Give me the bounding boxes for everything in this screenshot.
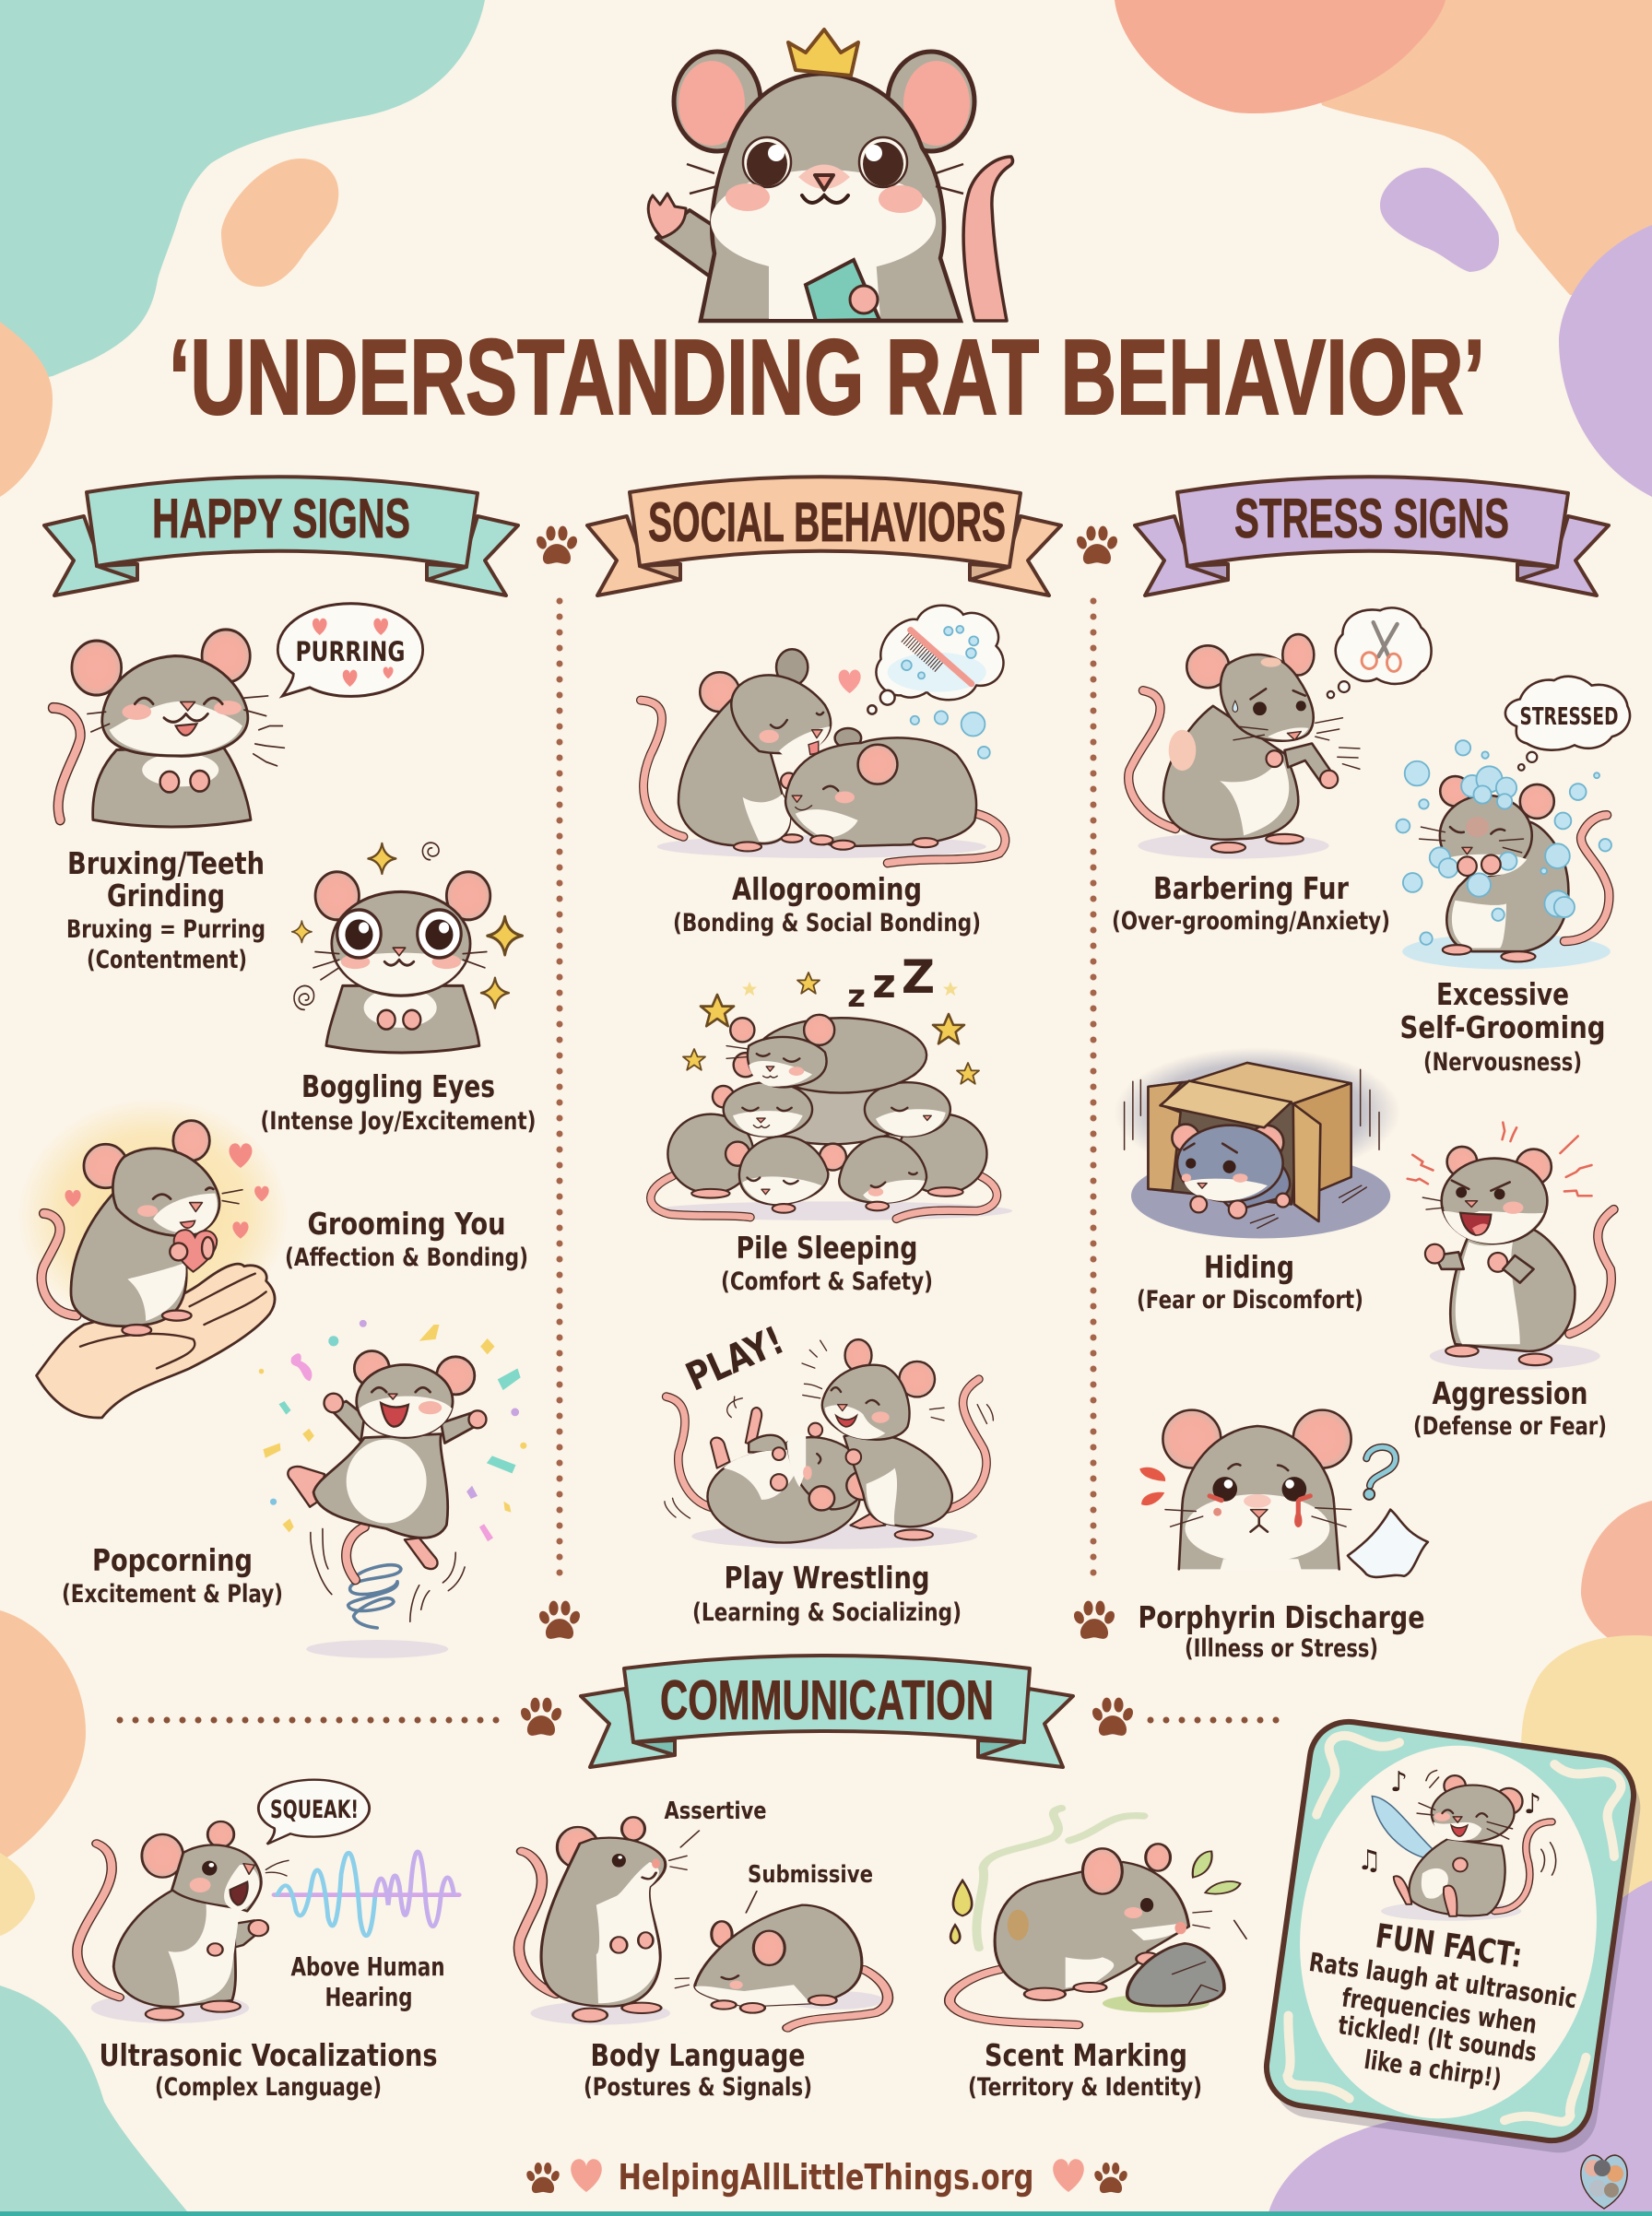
banner: stress signs: STRESS SIGNS: [1234, 488, 1509, 549]
fun fact text: Rats laugh at ultrasonic: [1307, 1947, 1579, 2014]
label: excessive self-grooming: Excessive: [1436, 976, 1569, 1012]
fun fact text: frequencies when: [1340, 1982, 1539, 2040]
dotted dividers: [120, 601, 1286, 1720]
illustration: grooming you: [18, 1099, 288, 1418]
label: bruxing: (Contentment): [87, 946, 247, 974]
fun fact text: [1307, 1917, 1579, 2093]
fun fact text: FUN FACT:: [1374, 1917, 1525, 1975]
pile sleeping stars and zzz: z: [872, 961, 896, 1008]
illustration: scent marking: [950, 1809, 1246, 2025]
label: excessive self-grooming: (Nervousness): [1423, 1048, 1582, 1077]
banner: social behaviors: [587, 477, 1061, 595]
label: barbering fur: (Over-grooming/Anxiety): [1112, 907, 1390, 936]
banner: happy signs: [44, 477, 518, 595]
blob: peach bottom left: [0, 1610, 86, 1862]
illustration: porphyrin discharge: [1139, 1410, 1428, 1577]
label: bruxing: Grinding: [107, 878, 225, 914]
fun fact text: tickled! (It sounds: [1337, 2010, 1539, 2068]
music notes: [1357, 1766, 1541, 1877]
music notes: ♪: [1524, 1788, 1541, 1821]
label: popcorning: [62, 1542, 283, 1609]
label: body language: Body Language: [590, 2037, 806, 2073]
label: porphyrin discharge: [1138, 1599, 1425, 1663]
label: popcorning: (Excitement & Play): [62, 1580, 283, 1609]
label: allogrooming: Allogrooming: [732, 871, 922, 907]
banner: social behaviors: SOCIAL BEHAVIORS: [648, 491, 1006, 553]
card rat with feather: [1372, 1771, 1556, 1921]
blob: small purple: [1380, 168, 1499, 272]
label: excessive self-grooming: Self-Grooming: [1399, 1009, 1606, 1045]
banner: communication: COMMUNICATION: [660, 1669, 994, 1731]
label: pile sleeping: [721, 1230, 933, 1296]
blob: teal top left: [0, 0, 485, 387]
blob: peach left: [0, 322, 53, 497]
logo badge: [1581, 2155, 1627, 2209]
label: barbering fur: [1112, 870, 1390, 936]
illustration: boggling eyes rat: [292, 843, 523, 1053]
footer website: HelpingAllLittleThings.org: [618, 2157, 1034, 2198]
label: hiding: Hiding: [1204, 1249, 1294, 1285]
panel: fun fact card: [1261, 1716, 1646, 2158]
label: above human hearing: Hearing: [324, 1982, 413, 2012]
label: ultrasonic vocalizations: (Complex Language): [155, 2073, 382, 2102]
label: grooming you: Grooming You: [308, 1206, 505, 1242]
music notes: ♫: [1357, 1845, 1382, 1877]
pile sleeping stars and zzz: z: [847, 978, 866, 1015]
illustration: hiding in box: [1114, 1047, 1400, 1239]
label: boggling eyes: Boggling Eyes: [301, 1068, 495, 1104]
label: popcorning: Popcorning: [92, 1542, 253, 1578]
label: above human hearing: [291, 1951, 444, 2012]
blob: purple right: [1559, 225, 1652, 497]
card corner flourishes: [1278, 1732, 1626, 2130]
label: play wrestling: [692, 1560, 962, 1627]
blob: small peach: [221, 159, 338, 287]
label: play wrestling: Play Wrestling: [725, 1560, 929, 1596]
banner: happy signs: HAPPY SIGNS: [152, 488, 410, 549]
label: scent marking: [968, 2037, 1202, 2102]
illustration: allogrooming: [641, 606, 1005, 863]
illustration: purring rat: [53, 604, 423, 827]
blob: purple bottom right: [1268, 1880, 1652, 2216]
label: submissive: Submissive: [748, 1861, 873, 1889]
label: excessive self-grooming: [1399, 976, 1606, 1077]
label: pile sleeping: Pile Sleeping: [736, 1230, 918, 1266]
label: bruxing: [66, 845, 266, 974]
label: squeak: SQUEAK!: [270, 1796, 359, 1824]
bottom teal bar: [0, 2211, 1652, 2216]
label: scent marking: Scent Marking: [985, 2037, 1187, 2073]
illustration: pile sleeping: [650, 1015, 1012, 1220]
mascot rat with crown and book: [648, 29, 1012, 321]
label: porphyrin discharge: Porphyrin Discharge: [1138, 1599, 1425, 1635]
label: ultrasonic vocalizations: [100, 2037, 437, 2102]
label: body language: (Postures & Signals): [584, 2073, 812, 2102]
banner: communication: [581, 1656, 1073, 1767]
label: barbering fur: Barbering Fur: [1153, 870, 1350, 906]
blob: yellow bottom left: [0, 1853, 35, 1936]
label: bruxing: Bruxing = Purring: [66, 915, 266, 944]
label: aggression: Aggression: [1433, 1375, 1587, 1411]
label: allogrooming: (Bonding & Social Bonding): [673, 909, 981, 937]
paw icons: [519, 526, 1135, 2193]
illustration: excessive self-grooming: [1396, 677, 1630, 969]
label: bruxing: Bruxing/Teeth: [67, 845, 265, 881]
label: porphyrin discharge: (Illness or Stress): [1185, 1634, 1378, 1663]
label: hiding: [1137, 1249, 1363, 1314]
label: grooming you: [285, 1206, 528, 1272]
illustration: ultrasonic vocalization rat: [77, 1780, 462, 2023]
label: scent marking: (Territory & Identity): [968, 2073, 1202, 2102]
label: body language: [584, 2037, 812, 2102]
label: above human hearing: Above Human: [291, 1951, 444, 1982]
label: aggression: (Defense or Fear): [1413, 1412, 1607, 1441]
blob: peach top right: [1291, 0, 1652, 295]
illustration: body language rats: [519, 1817, 888, 2028]
label: ultrasonic vocalizations: Ultrasonic Vocalizations: [100, 2037, 437, 2073]
illustration: play wrestling: [665, 1339, 993, 1549]
label: boggling eyes: [260, 1068, 537, 1136]
label: allogrooming: [673, 871, 981, 937]
blob: salmon bottom right: [1581, 1501, 1652, 1659]
label: purring: PURRING: [295, 636, 406, 667]
label: aggression: [1413, 1375, 1607, 1441]
fun fact text: like a chirp!): [1363, 2045, 1504, 2093]
blob: teal bottom left: [0, 1986, 191, 2216]
label: boggling eyes: (Intense Joy/Excitement): [260, 1107, 537, 1136]
illustration: popcorning: [259, 1320, 526, 1658]
music notes: ♪: [1390, 1766, 1408, 1798]
blob: yellow right: [1512, 1635, 1652, 1936]
illustration: barbering fur: [1128, 607, 1432, 859]
PLAY! label: PLAY!: [679, 1317, 790, 1400]
label: hiding: (Fear or Discomfort): [1137, 1286, 1363, 1314]
blob: salmon top right: [1115, 0, 1446, 113]
label: assertive: Assertive: [664, 1798, 767, 1825]
label: grooming you: (Affection & Bonding): [285, 1244, 528, 1272]
pile sleeping stars and zzz: [683, 950, 979, 1084]
label: play wrestling: (Learning & Socializing): [692, 1598, 962, 1627]
illustration: aggression: [1408, 1123, 1614, 1370]
pile sleeping stars and zzz: Z: [902, 950, 935, 1004]
label: pile sleeping: (Comfort & Safety): [721, 1267, 933, 1296]
banner: stress signs: [1135, 477, 1609, 595]
